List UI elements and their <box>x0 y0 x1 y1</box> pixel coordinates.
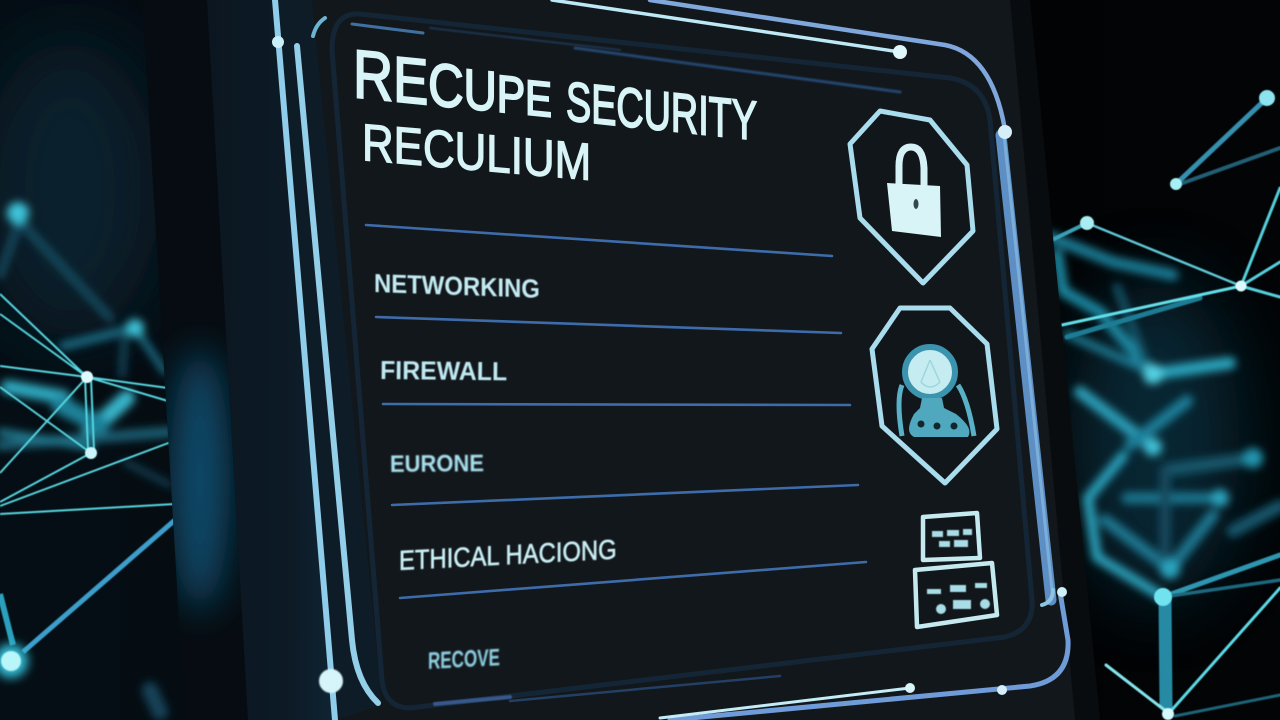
title: SECURITY <box>566 70 757 152</box>
title: RECUPE <box>353 36 552 132</box>
panel: device right edge <box>1000 0 1100 720</box>
list item: ethical hacking: ETHICAL HACIONG <box>399 534 617 576</box>
bottom rules <box>435 676 780 704</box>
list item: firewall: FIREWALL <box>380 355 507 386</box>
list item: eurone: EURONE <box>390 450 484 478</box>
panel: inner screen border <box>332 14 1032 708</box>
title: RECULIUM <box>362 114 591 192</box>
list item: blurred label: RECOVE <box>428 644 500 675</box>
icon: hacker head shield <box>872 308 997 483</box>
icon: padlock shield <box>850 111 973 283</box>
network: right <box>1050 90 1280 720</box>
frame: nodes <box>272 36 1067 695</box>
network: left <box>0 40 175 712</box>
title <box>353 36 757 192</box>
list rules <box>366 225 866 598</box>
header rules <box>352 24 900 92</box>
panel: device left edge <box>142 0 333 720</box>
frame: glowing outer lines <box>275 0 1068 720</box>
list item: networking: NETWORKING <box>374 268 540 304</box>
panel: left frame strip <box>275 0 382 720</box>
icon: keyboard panels <box>915 513 997 627</box>
panel: screen face <box>272 0 1075 720</box>
